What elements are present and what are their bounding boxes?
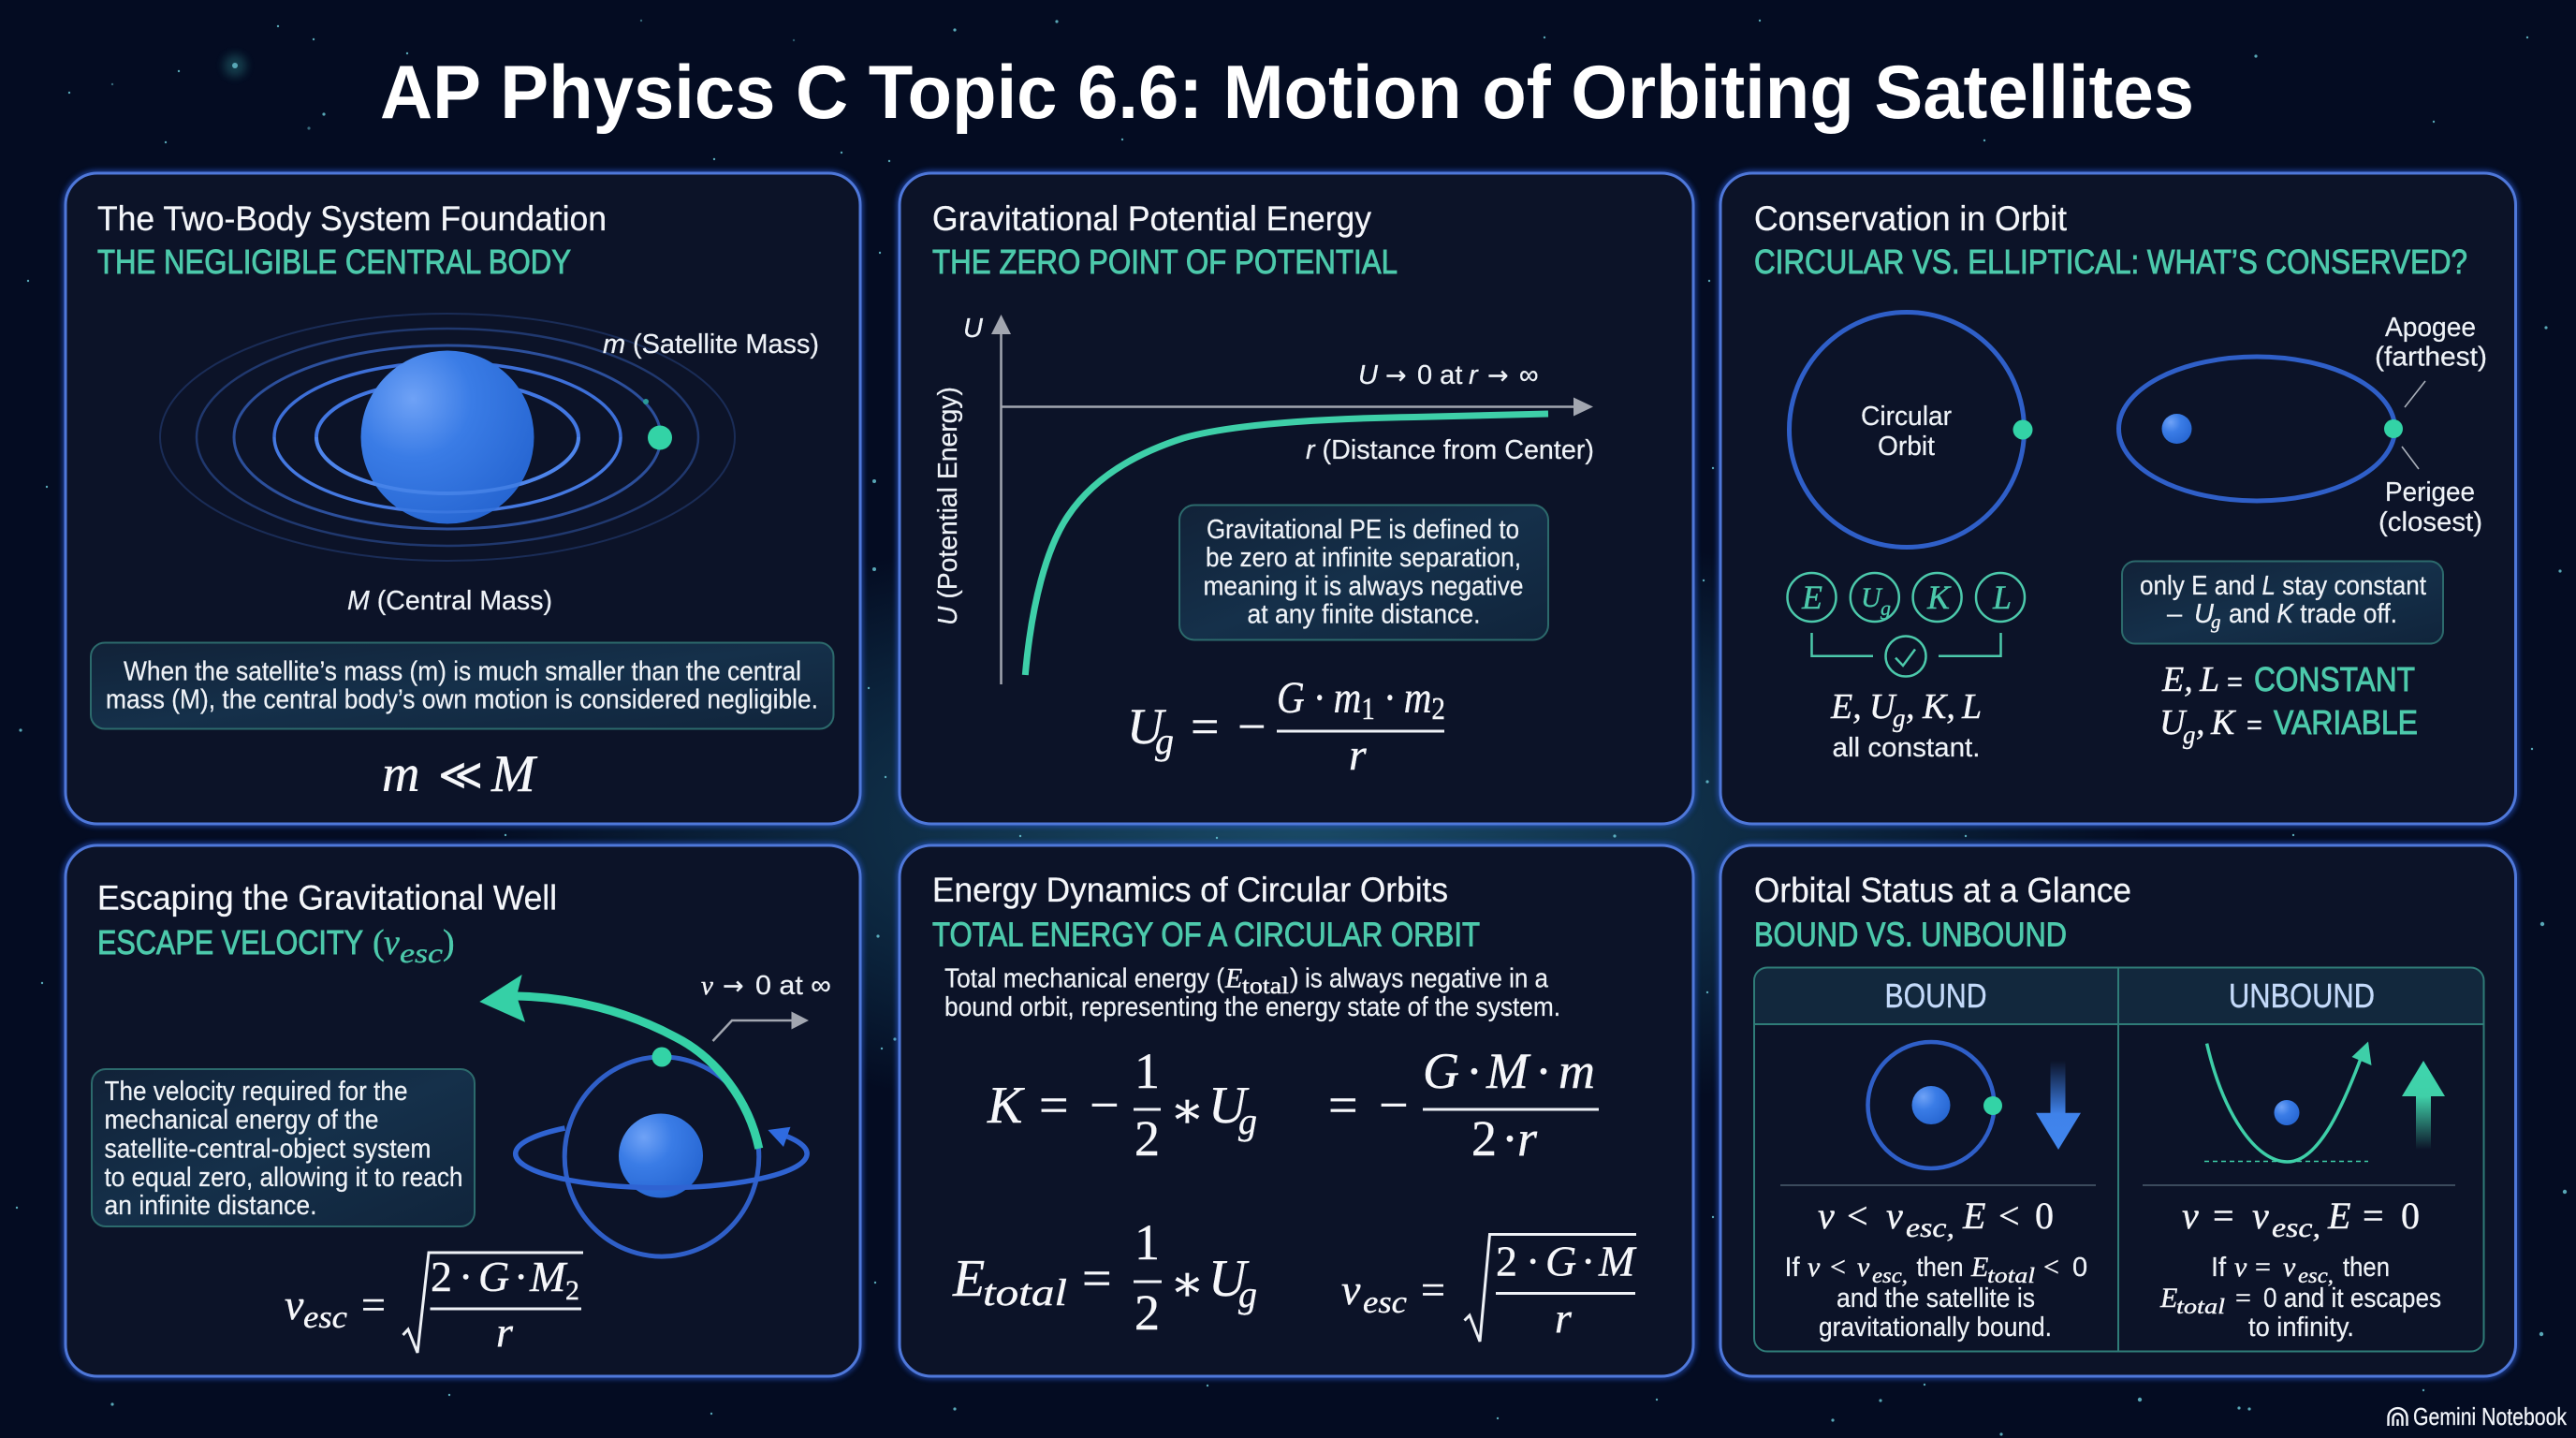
formula: kinetic energy: · bbox=[1535, 1043, 1552, 1099]
text: unbound description: esc, bbox=[2298, 1264, 2334, 1287]
formula: escape velocity: v bbox=[1341, 1266, 1361, 1313]
formula: total energy: g bbox=[1238, 1273, 1257, 1315]
callout: at any finite distance. bbox=[1247, 599, 1481, 629]
table: bound vs unbound bbox=[1754, 968, 2484, 1352]
formula: escape velocity: G bbox=[478, 1253, 509, 1300]
callout: U bbox=[2194, 599, 2215, 629]
formula: kinetic energy: − bbox=[1379, 1077, 1409, 1135]
formula: potential energy: 2 bbox=[1431, 692, 1445, 726]
formula: escape velocity: = bbox=[361, 1281, 386, 1328]
formula: kinetic energy: 2 bbox=[1134, 1110, 1160, 1167]
text: total mechanical energy: bound orbit, representing the energy state of the system. bbox=[944, 992, 1560, 1022]
callout: mechanical energy of the bbox=[105, 1105, 378, 1135]
text: bound description bbox=[1784, 1252, 2087, 1343]
text: unbound description: = bbox=[2235, 1283, 2251, 1313]
text: total mechanical energy: total bbox=[1242, 974, 1289, 999]
formula: escape velocity: r bbox=[1555, 1294, 1573, 1342]
icon: unbound trajectory bbox=[2204, 1041, 2372, 1162]
text: unbound description: If bbox=[2211, 1253, 2227, 1283]
callout: be zero at infinite separation, bbox=[1206, 543, 1521, 573]
formula: bound condition: 0 bbox=[2035, 1195, 2054, 1237]
subheading: BOUND VS. UNBOUND bbox=[1754, 916, 2067, 953]
subheading: ) bbox=[443, 923, 455, 962]
text: unbound description: v bbox=[2283, 1252, 2296, 1283]
text: all constant: E, bbox=[1830, 687, 1862, 726]
formula: escape velocity bbox=[285, 1253, 583, 1356]
callout: satellite-central-object system bbox=[105, 1135, 431, 1165]
text: bound description: gravitationally bound. bbox=[1819, 1313, 2052, 1343]
text: bound description: < bbox=[2043, 1252, 2059, 1283]
panel: two-body system bbox=[66, 173, 860, 824]
subheading: THE NEGLIGIBLE CENTRAL BODY bbox=[97, 242, 571, 281]
callout bbox=[2122, 562, 2443, 644]
formula: unbound condition: = bbox=[2213, 1195, 2234, 1237]
label: satellite mass: (Satellite Mass) bbox=[633, 330, 819, 360]
callout: Gravitational PE is defined to bbox=[1207, 515, 1519, 545]
formula: kinetic energy: · bbox=[1466, 1043, 1483, 1099]
formula: escape velocity: · bbox=[459, 1253, 473, 1300]
icon: bound orbit bbox=[1868, 1042, 2002, 1168]
summary: constant vs variable: E, bbox=[2161, 660, 2193, 699]
icons: conserved quantity chips: E bbox=[1801, 579, 1822, 616]
formula: escape velocity: = bbox=[1421, 1266, 1445, 1313]
summary: constant vs variable: = bbox=[2227, 668, 2243, 697]
formula: unbound condition: 0 bbox=[2401, 1195, 2420, 1237]
panel: orbital status bbox=[1720, 845, 2516, 1376]
panel: energy dynamics bbox=[900, 845, 1693, 1376]
formula: total energy: = bbox=[1082, 1250, 1112, 1308]
summary: constant vs variable: VARIABLE bbox=[2274, 703, 2418, 741]
heading: The Two-Body System Foundation bbox=[97, 199, 607, 238]
formula: bound condition: < bbox=[1847, 1195, 1868, 1237]
formula: unbound condition: v bbox=[2252, 1195, 2269, 1237]
formula: escape velocity bbox=[1341, 1234, 1637, 1342]
panel: conservation in orbit bbox=[1720, 173, 2516, 824]
text: bound description: then bbox=[1917, 1253, 1964, 1283]
summary: constant vs variable: U bbox=[2159, 703, 2188, 742]
subheading: TOTAL ENERGY OF A CIRCULAR ORBIT bbox=[932, 916, 1480, 953]
summary: constant vs variable: L bbox=[2199, 660, 2219, 699]
formula: escape velocity: esc bbox=[303, 1300, 347, 1335]
icon: Gemini Notebook mark bbox=[2389, 1408, 2408, 1426]
label: central mass: M (Central Mass) bbox=[347, 586, 552, 616]
formula: escape velocity: · bbox=[514, 1253, 528, 1300]
text: all constant: g bbox=[1893, 704, 1906, 732]
text: bound description: v bbox=[1857, 1252, 1870, 1283]
callout: mass (M), the central body’s own motion is considered negligible. bbox=[106, 685, 818, 715]
callout: When the satellite’s mass (m) is much smaller than the central bbox=[124, 657, 801, 687]
callout: The velocity required for the bbox=[105, 1077, 408, 1107]
diagram: elliptical orbit: Perigee bbox=[2385, 477, 2475, 507]
summary: constant vs variable: g bbox=[2183, 721, 2196, 749]
callout: – bbox=[2167, 599, 2183, 629]
formula: kinetic energy: = bbox=[1039, 1077, 1069, 1135]
header: bound: BOUND bbox=[1885, 976, 1986, 1015]
formula: m much less than M: m bbox=[382, 745, 419, 803]
formula: potential energy: − bbox=[1237, 698, 1266, 755]
formula: escape velocity: M bbox=[1598, 1238, 1637, 1284]
formula: total energy: ∗ bbox=[1170, 1255, 1205, 1312]
text: all constant: L bbox=[1961, 687, 1982, 726]
icons: conserved quantity chips: L bbox=[1992, 579, 2012, 616]
formula: potential energy: U bbox=[1127, 698, 1166, 755]
header: unbound: UNBOUND bbox=[2229, 976, 2375, 1015]
chart: potential energy curve: → bbox=[1487, 361, 1509, 390]
summary: constant vs variable bbox=[2159, 660, 2418, 749]
chart: potential energy curve bbox=[933, 314, 1594, 684]
diagram: orbit with escape path bbox=[479, 975, 807, 1256]
panel: escaping the gravitational well bbox=[66, 845, 860, 1376]
formula: bound condition: v bbox=[1886, 1195, 1903, 1237]
callout: only E and L stay constant bbox=[2140, 571, 2426, 601]
formula: m much less than M: M bbox=[490, 745, 538, 803]
text: unbound description: E bbox=[2159, 1283, 2177, 1313]
summary: constant vs variable: = bbox=[2247, 711, 2262, 741]
icons: conserved quantity chips: g bbox=[1881, 596, 1891, 620]
formula: potential energy: G · m bbox=[1277, 673, 1375, 723]
subheading: CIRCULAR VS. ELLIPTICAL: WHAT’S CONSERVED? bbox=[1754, 242, 2467, 281]
text: total mechanical energy: Total mechanical energy ( bbox=[944, 964, 1224, 994]
formula: escape velocity: · bbox=[1526, 1238, 1540, 1284]
text: all constant: all constant. bbox=[1833, 733, 1981, 763]
formula: unbound condition: esc, bbox=[2272, 1212, 2320, 1243]
formula: total energy: total bbox=[983, 1271, 1067, 1313]
text: unbound description: v bbox=[2234, 1252, 2247, 1283]
formula: escape velocity: M bbox=[529, 1253, 568, 1300]
formula: escape velocity: 2 bbox=[1496, 1238, 1517, 1284]
formula: escape velocity: v bbox=[285, 1281, 304, 1328]
formula: unbound condition: v bbox=[2182, 1195, 2199, 1237]
chart: potential energy curve: U (Potential Energy) bbox=[933, 387, 963, 625]
formula: potential energy: g bbox=[1155, 720, 1174, 762]
chart: potential energy curve: → bbox=[1385, 361, 1407, 390]
formula: kinetic energy: 1 bbox=[1134, 1043, 1160, 1099]
arrow: downward bbox=[2036, 1061, 2081, 1150]
formula: kinetic energy bbox=[987, 1043, 1599, 1167]
formula: total energy: 2 bbox=[1134, 1284, 1160, 1341]
formula: kinetic energy: K bbox=[987, 1077, 1025, 1135]
diagram: elliptical orbit bbox=[2119, 313, 2487, 537]
formula: escape velocity: G bbox=[1545, 1238, 1576, 1284]
text: all constant: , bbox=[1906, 687, 1915, 726]
formula: potential energy: = bbox=[1191, 698, 1219, 755]
chart: potential energy curve: 0 at bbox=[1417, 360, 1462, 390]
formula: total energy: U bbox=[1208, 1250, 1250, 1308]
formula: kinetic energy: − bbox=[1090, 1077, 1120, 1135]
formula: kinetic energy: M bbox=[1486, 1043, 1531, 1099]
chart: potential energy curve: r (Distance from Center) bbox=[1306, 435, 1594, 465]
summary: constant vs variable: , bbox=[2196, 703, 2205, 742]
summary: constant vs variable: K bbox=[2210, 703, 2236, 742]
text: bound description: 0 bbox=[2072, 1253, 2087, 1283]
callout: g bbox=[2211, 610, 2220, 633]
formula: total energy: 1 bbox=[1134, 1214, 1160, 1270]
formula: escape velocity: esc bbox=[1363, 1285, 1407, 1320]
formula: bound condition: esc, bbox=[1906, 1212, 1954, 1243]
formula: kinetic energy: = bbox=[1328, 1077, 1358, 1135]
label: satellite mass: m bbox=[603, 330, 625, 360]
callout bbox=[91, 642, 833, 728]
formula: escape velocity: 2 bbox=[565, 1275, 579, 1306]
text: bound description: esc, bbox=[1872, 1264, 1908, 1287]
summary: constant vs variable: CONSTANT bbox=[2254, 660, 2415, 698]
text: unbound description: total bbox=[2176, 1295, 2225, 1318]
text: all constant: U bbox=[1869, 687, 1897, 726]
title: AP Physics C Topic 6.6: Motion of Orbiting Satellites bbox=[380, 51, 2194, 135]
subheading: ( bbox=[373, 923, 385, 962]
formula: kinetic energy: G bbox=[1423, 1043, 1459, 1099]
formula: potential energy: · m bbox=[1375, 673, 1431, 723]
formula: total energy bbox=[952, 1214, 1257, 1341]
text: bound description: and the satellite is bbox=[1837, 1284, 2035, 1313]
formula: escape velocity: r bbox=[496, 1308, 514, 1356]
formula: kinetic energy: g bbox=[1238, 1100, 1257, 1142]
chart: potential energy curve: U bbox=[963, 314, 984, 344]
chart: potential energy curve: r bbox=[1469, 360, 1479, 390]
arrow: upward bbox=[2402, 1061, 2445, 1150]
text: unbound description: 0 and it escapes bbox=[2263, 1284, 2441, 1313]
text: total mechanical energy: is always negative in a bbox=[1305, 964, 1549, 994]
text: total mechanical energy: ) bbox=[1290, 964, 1299, 994]
formula: kinetic energy: ∗ bbox=[1170, 1082, 1205, 1138]
formula: kinetic energy: · bbox=[1501, 1110, 1518, 1167]
text: bound description: total bbox=[1987, 1264, 2035, 1287]
callout bbox=[1179, 506, 1548, 640]
formula: potential energy: r bbox=[1349, 730, 1367, 780]
formula: bound condition: v bbox=[1818, 1195, 1835, 1237]
text: unbound description: then bbox=[2343, 1253, 2390, 1283]
text: total mechanical energy bbox=[944, 962, 1560, 1022]
formula: kinetic energy: m bbox=[1559, 1043, 1595, 1099]
formula: kinetic energy: 2 bbox=[1471, 1110, 1497, 1167]
formula: unbound condition: = bbox=[2363, 1195, 2384, 1237]
subheading: THE ZERO POINT OF POTENTIAL bbox=[932, 242, 1398, 281]
label: velocity at infinity: → bbox=[723, 972, 744, 1001]
callout: an infinite distance. bbox=[105, 1191, 316, 1221]
subheading: v bbox=[384, 923, 400, 962]
formula: escape velocity: 2 bbox=[431, 1253, 452, 1300]
formula: potential energy bbox=[1127, 673, 1445, 780]
formula: bound condition: E bbox=[1962, 1195, 1985, 1237]
callout: meaning it is always negative bbox=[1204, 571, 1524, 601]
text: unbound description bbox=[2159, 1252, 2441, 1343]
arrow: residual direction bbox=[713, 1011, 809, 1041]
text: bound description: v bbox=[1808, 1252, 1821, 1283]
diagram: elliptical orbit: (farthest) bbox=[2375, 343, 2487, 373]
chart: potential energy curve: U bbox=[1358, 360, 1379, 390]
heading: Energy Dynamics of Circular Orbits bbox=[932, 871, 1448, 909]
diagram: elliptical orbit: (closest) bbox=[2378, 507, 2482, 537]
heading: Escaping the Gravitational Well bbox=[97, 878, 557, 917]
text: total mechanical energy: E bbox=[1224, 962, 1242, 994]
formula: escape velocity: · bbox=[1581, 1238, 1595, 1284]
chart: potential energy curve: ∞ bbox=[1519, 360, 1539, 390]
formula: potential energy: 1 bbox=[1361, 692, 1375, 726]
diagram: circular orbit bbox=[1790, 313, 2033, 547]
icons: conserved quantity chips: K bbox=[1926, 579, 1952, 616]
callout: to equal zero, allowing it to reach bbox=[105, 1163, 462, 1193]
icons: conserved quantity chips bbox=[1788, 573, 2025, 676]
text: all constant bbox=[1830, 687, 1982, 763]
formula: kinetic energy: U bbox=[1208, 1077, 1250, 1135]
subheading: ESCAPE VELOCITY bbox=[97, 923, 363, 961]
label: velocity at infinity: v bbox=[701, 971, 713, 1001]
callout bbox=[92, 1069, 475, 1226]
formula: unbound condition: E bbox=[2327, 1195, 2350, 1237]
diagram: circular orbit: Circular bbox=[1861, 402, 1952, 432]
text: bound description: < bbox=[1830, 1252, 1846, 1283]
formula: kinetic energy: r bbox=[1517, 1110, 1538, 1167]
panel: gravitational potential energy bbox=[900, 173, 1693, 824]
text: all constant: K, bbox=[1922, 687, 1955, 726]
formula: total energy: E bbox=[952, 1250, 985, 1308]
text: bound description: E bbox=[1970, 1252, 1988, 1283]
diagram: circular orbit: Orbit bbox=[1878, 432, 1935, 462]
heading: Conservation in Orbit bbox=[1754, 199, 2068, 238]
icons: conserved quantity chips: U bbox=[1861, 582, 1883, 613]
text: unbound description: to infinity. bbox=[2248, 1313, 2354, 1343]
diagram: central mass with orbit rings bbox=[160, 314, 735, 561]
label: velocity at infinity: 0 at ∞ bbox=[755, 971, 831, 1001]
subheading: esc bbox=[400, 938, 443, 969]
callout: and K trade off. bbox=[2229, 599, 2408, 629]
text: bound description: If bbox=[1784, 1253, 1801, 1283]
formula: bound condition: < bbox=[1998, 1195, 2020, 1237]
heading: Gravitational Potential Energy bbox=[932, 199, 1371, 238]
text: unbound description: = bbox=[2255, 1252, 2271, 1283]
diagram: elliptical orbit: Apogee bbox=[2385, 313, 2476, 343]
heading: Orbital Status at a Glance bbox=[1754, 871, 2131, 910]
formula: m much less than M: ≪ bbox=[438, 751, 483, 799]
